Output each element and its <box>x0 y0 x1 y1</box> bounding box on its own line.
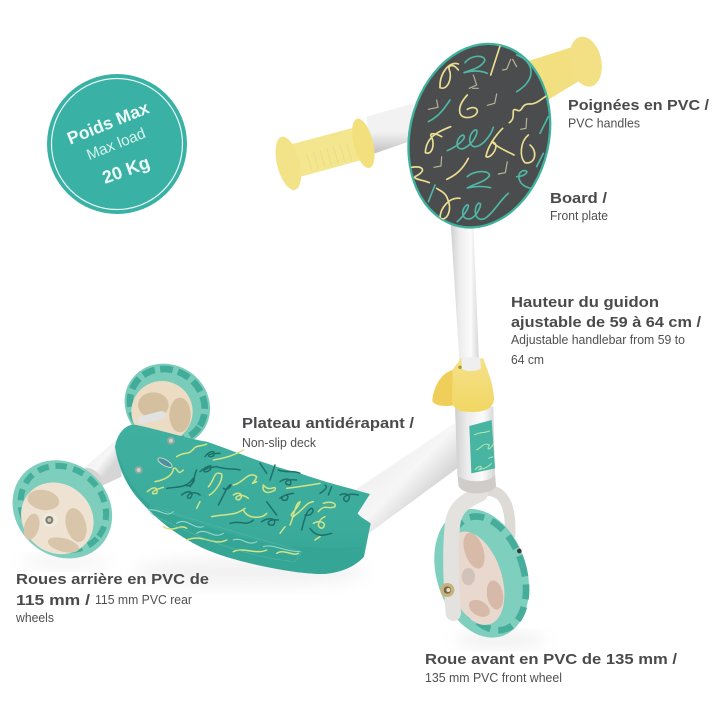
rear near wheel <box>0 440 132 579</box>
label: handles: Poignées en PVC / <box>568 97 710 114</box>
label: handlebar height: Adjustable handlebar from 59 to <box>511 333 685 347</box>
label: handlebar height: Hauteur du guidon <box>511 294 659 311</box>
label: board: Front plate <box>550 209 608 223</box>
badge text: Poids Max <box>64 97 152 148</box>
front board <box>407 42 552 229</box>
label: deck: Non-slip deck <box>242 436 317 450</box>
label: handlebar height: ajustable de 59 à 64 cm / <box>511 314 702 331</box>
down tube <box>352 423 459 534</box>
front wheel hub <box>435 524 515 633</box>
label: board: Board / <box>550 190 608 207</box>
head tube <box>455 407 495 481</box>
label: handles: PVC handles <box>568 116 640 130</box>
rear wheel hub <box>6 468 108 569</box>
right handlebar grip <box>527 34 606 102</box>
deck bolts <box>135 437 175 474</box>
badge text: 20 Kg <box>100 152 152 188</box>
label: deck <box>242 415 415 450</box>
label: rear wheels <box>15 571 209 625</box>
headset ring <box>457 473 496 493</box>
yellow clamp collar <box>432 357 494 412</box>
left handlebar grip and bar <box>271 103 413 193</box>
head sticker <box>469 420 495 473</box>
label: front wheel <box>425 651 678 685</box>
deck logo <box>157 456 173 469</box>
board scribbles <box>412 46 548 222</box>
steering stem <box>451 223 479 370</box>
label: rear wheels: 115 mm / <box>16 592 91 609</box>
badge text: Max load <box>84 125 148 164</box>
fork front arm <box>451 494 480 613</box>
label: board <box>550 190 608 223</box>
label: deck: Plateau antidérapant / <box>242 415 415 432</box>
label: rear wheels: 115 mm PVC rear <box>95 593 192 607</box>
label: rear wheels: wheels <box>15 611 54 625</box>
fork rear arm <box>478 490 510 535</box>
label: handlebar height <box>511 294 702 367</box>
front wheel tyre <box>418 497 545 650</box>
deck scribbles <box>147 444 358 562</box>
far rear wheel <box>108 347 226 463</box>
label: front wheel: Roue avant en PVC de 135 mm / <box>425 651 678 668</box>
rear axle tube <box>79 437 122 492</box>
front wheel, fork and head <box>418 357 545 650</box>
weight badge <box>47 74 187 214</box>
label: handles <box>568 97 710 130</box>
floor shadows <box>20 556 545 647</box>
badge text <box>64 97 152 188</box>
label: front wheel: 135 mm PVC front wheel <box>425 671 562 685</box>
label: handlebar height: 64 cm <box>511 353 544 367</box>
label: rear wheels: Roues arrière en PVC de <box>16 571 209 588</box>
deck <box>115 425 371 574</box>
